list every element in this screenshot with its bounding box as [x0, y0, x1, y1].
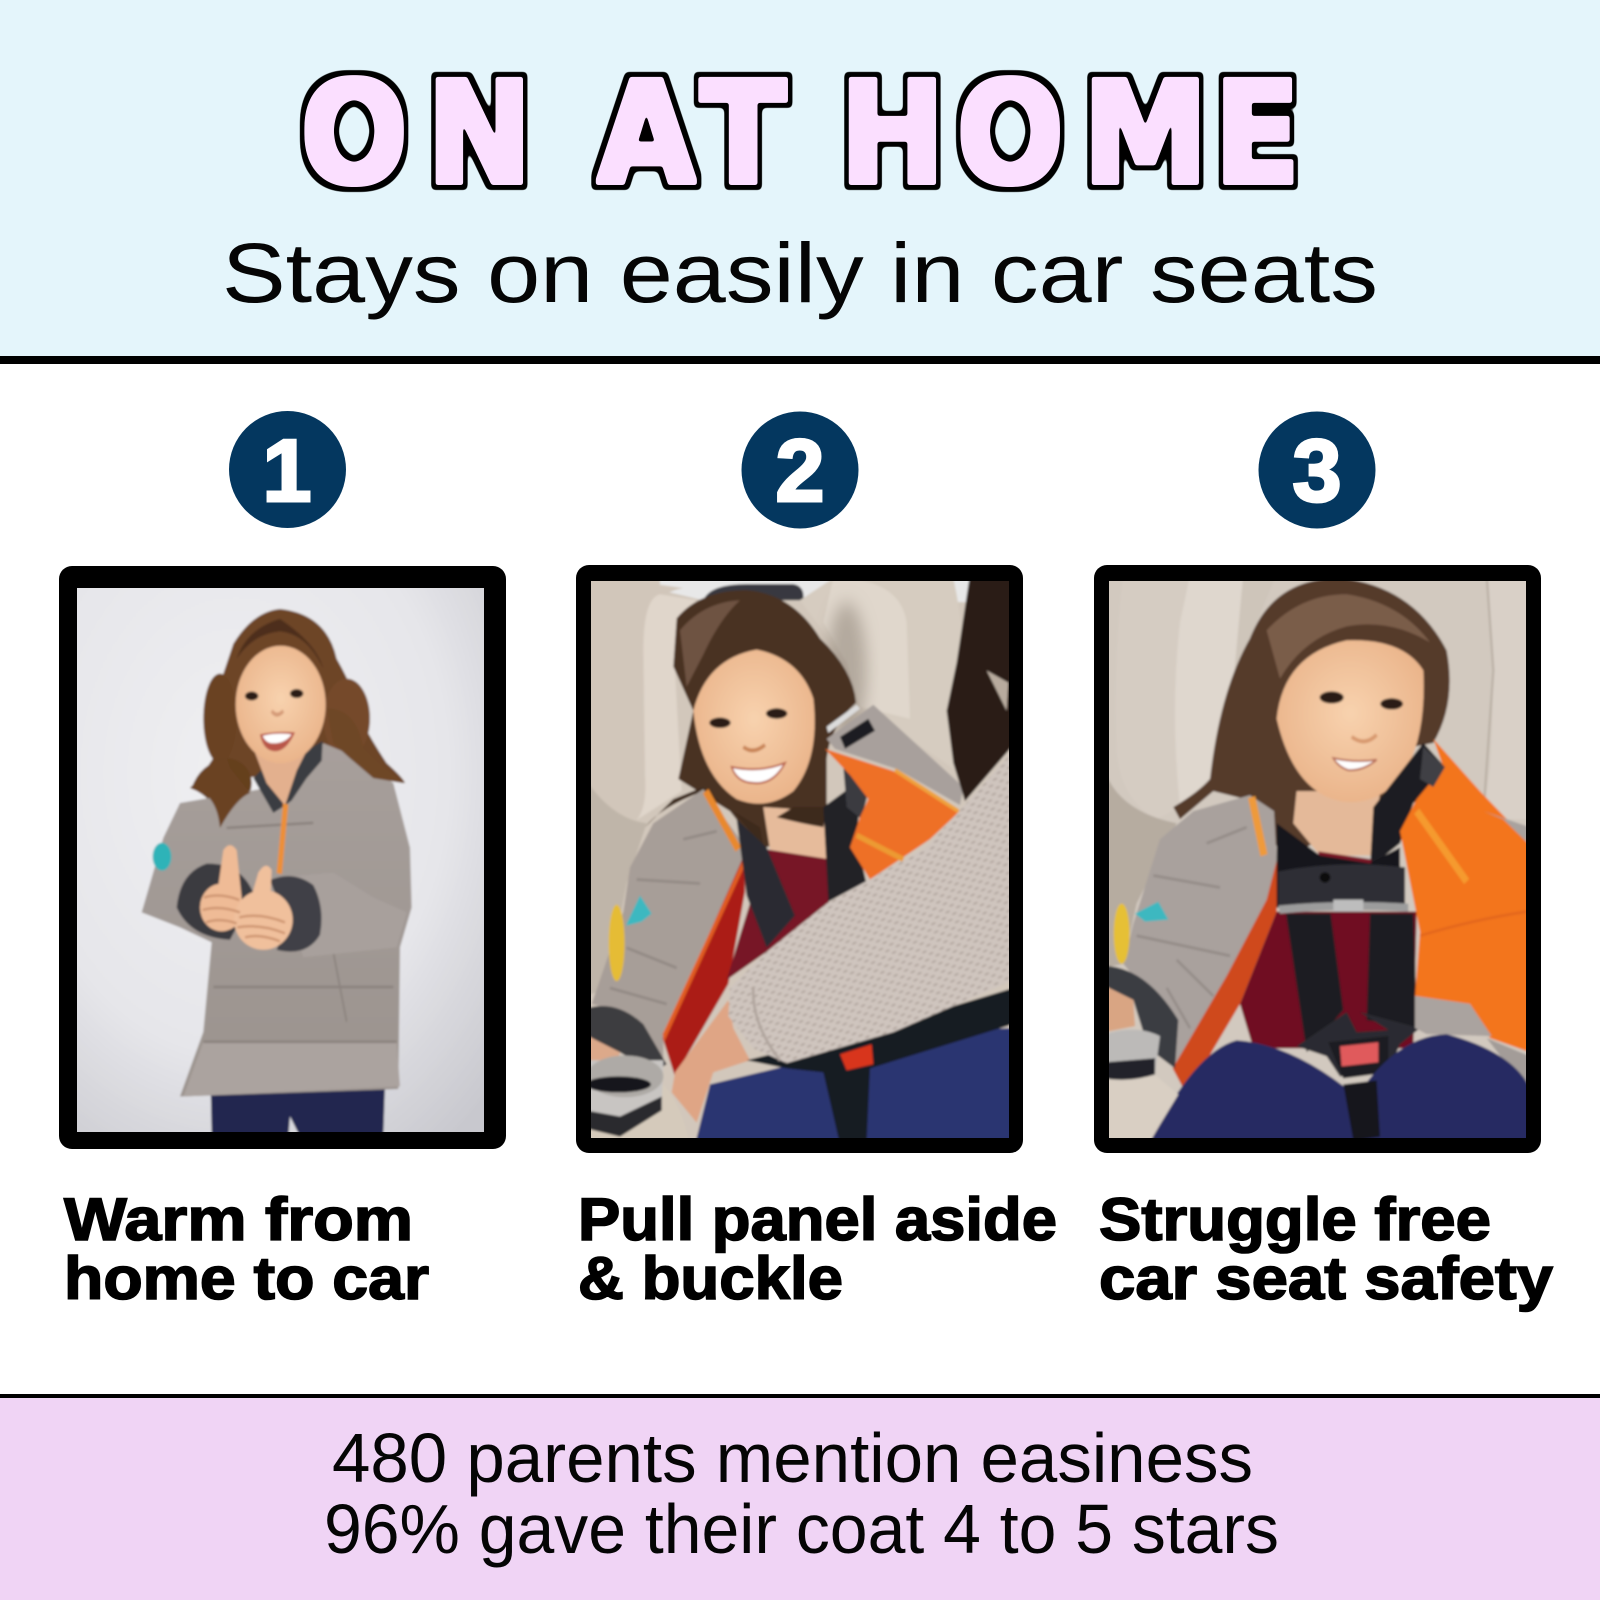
smile: [732, 763, 785, 783]
neck: [1293, 791, 1380, 855]
step 3 caption: [1099, 1186, 1554, 1312]
eyes: [1320, 691, 1344, 703]
step 3 caption: Struggle free: [1099, 1186, 1491, 1253]
orange fleece: [825, 749, 960, 879]
collar: [253, 768, 285, 813]
right harness strap: [823, 779, 866, 902]
footer rule: [0, 1394, 1600, 1398]
coat hem: [183, 1042, 400, 1096]
child hand: [588, 1036, 620, 1062]
photo frame 3: [1094, 565, 1541, 1153]
step 2 number badge: 2: [776, 421, 824, 520]
seat lower left: [1103, 767, 1177, 968]
footer stat line 2: 96% gave their coat 4 to 5 stars: [324, 1490, 1279, 1568]
cup: [587, 1060, 663, 1137]
dark lap gap: [747, 988, 1013, 1145]
lower seat left: [591, 787, 646, 994]
step 2 caption: [578, 1186, 1057, 1312]
eyes and mouth: [245, 692, 258, 700]
red lining: [663, 855, 745, 1076]
grey jacket right: [827, 705, 963, 805]
sweater sleeve: [728, 751, 1013, 1063]
hair back: [189, 608, 406, 798]
eyes: [709, 718, 731, 728]
right cuff: [270, 876, 321, 952]
jacket left: [1123, 795, 1277, 1068]
photo 1: girl in coat giving thumbs up: [77, 588, 484, 1132]
subtitle: Stays on easily in car seats: [222, 226, 1378, 320]
head shadow on seat: [827, 602, 867, 739]
parent hair: [947, 574, 1013, 801]
cup: [1105, 1030, 1160, 1080]
footer stat line 1: 480 parents mention easiness: [332, 1419, 1253, 1497]
crotch strap: [1343, 1080, 1380, 1141]
straps: [1286, 914, 1343, 1052]
collar shadow: [1370, 743, 1445, 867]
headrest channels: [1113, 574, 1190, 819]
parent arm skin: [672, 1000, 750, 1123]
step 1 caption: home to car: [64, 1245, 429, 1312]
photo 2: parent pulling panel aside and buckling: [591, 581, 1009, 1138]
face: [236, 646, 326, 763]
shirt: [1240, 912, 1417, 1048]
jeans: [695, 1028, 1013, 1145]
step 3 caption: car seat safety: [1099, 1245, 1554, 1312]
red lining: [1173, 851, 1279, 1094]
teal logo: [1135, 902, 1168, 922]
teal badge: [153, 843, 171, 871]
left headrest: [659, 584, 682, 593]
hair: [1173, 578, 1450, 859]
buckle: [1297, 1012, 1420, 1076]
face: [1277, 640, 1424, 802]
teal logo: [627, 896, 652, 926]
step 2 caption: & buckle: [578, 1245, 843, 1312]
shirt: [727, 849, 830, 980]
zipper: [279, 804, 286, 874]
cuff: [1105, 966, 1178, 1068]
header panel: [0, 0, 1600, 356]
photo frame 1: [59, 566, 506, 1149]
seat bottom left: [1105, 1076, 1178, 1145]
right headrest: [800, 581, 958, 602]
neck: [254, 752, 306, 805]
left cuff: [177, 864, 253, 940]
pants: [210, 1088, 386, 1132]
child cuff: [588, 1006, 667, 1072]
hair wisps: [646, 788, 762, 840]
header rule: [0, 356, 1600, 364]
photo frame 2: [576, 565, 1023, 1153]
step 2 number badge: [742, 412, 858, 528]
step 1 number badge: 1: [263, 421, 311, 520]
face: [693, 650, 815, 804]
nose and smile: [1352, 735, 1377, 741]
step 3 number badge: [1258, 412, 1376, 528]
fleece collar: [843, 767, 868, 819]
title: ON AT HOME: [0, 53, 1300, 216]
jeans: [1148, 1034, 1530, 1145]
step 1 number badge: [229, 411, 346, 528]
chest: [763, 807, 827, 863]
chest clip: [1278, 864, 1405, 906]
curls front: [192, 765, 250, 828]
orange fleece: [1400, 739, 1530, 1052]
right thumbs up hand: [234, 866, 293, 950]
cup holder: [587, 1084, 689, 1145]
hand: [1105, 986, 1135, 1032]
step 3 number badge: 3: [1293, 421, 1341, 520]
coat: [142, 743, 412, 1096]
black harness collar: [1277, 823, 1400, 908]
grey jacket left: [592, 789, 745, 1060]
yellow label: [609, 905, 625, 981]
seat top gap: [659, 581, 971, 603]
dark knit collar: [1420, 747, 1445, 787]
sleeves: [303, 936, 338, 955]
left harness strap: [737, 819, 795, 948]
step 2 caption: Pull panel aside: [578, 1186, 1057, 1253]
footer panel: [0, 1398, 1600, 1600]
photo 3: girl buckled safely in car seat: [1100, 570, 1540, 1150]
yellow label: [1114, 904, 1130, 964]
step 1 caption: [64, 1186, 429, 1312]
left thumbs up hand: [200, 845, 243, 931]
orange zip strip: [706, 791, 738, 849]
red buckle: [840, 1044, 873, 1070]
grey jacket pieces: [1415, 996, 1492, 1036]
orange zip strip: [1252, 797, 1264, 855]
finger lines: [203, 896, 285, 941]
step 1 caption: Warm from: [64, 1186, 413, 1253]
hair: [673, 590, 856, 849]
